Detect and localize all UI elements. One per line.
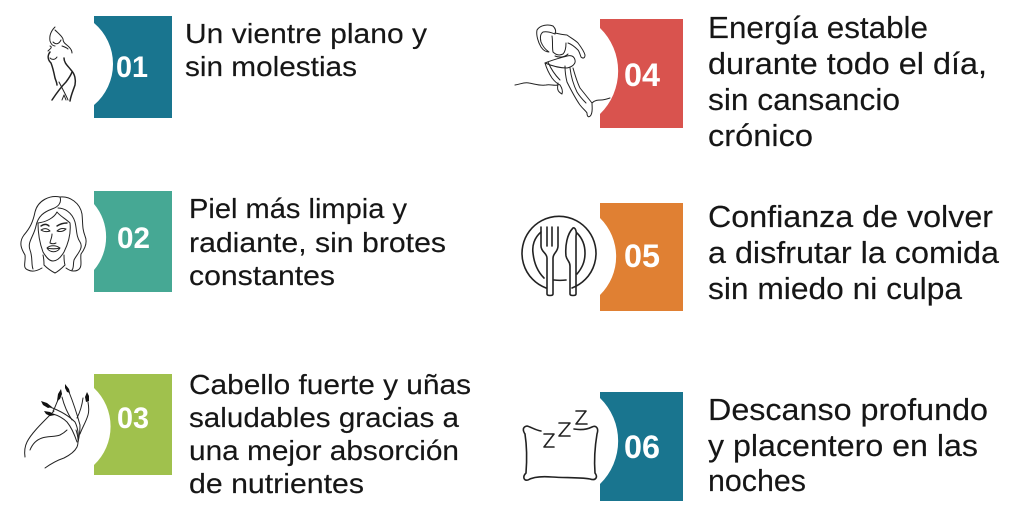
text block 06: y placentero en las bbox=[708, 429, 978, 463]
icon: plate with fork and knife bbox=[522, 216, 596, 296]
number tab 05 bbox=[600, 203, 683, 311]
text block 05: Confianza de volver bbox=[708, 200, 993, 234]
text block 01: Un vientre plano y bbox=[185, 18, 427, 49]
icon: hand with long nails bbox=[25, 392, 89, 468]
text block 04 bbox=[708, 11, 987, 153]
icon: pillow with zzz bbox=[523, 411, 598, 480]
text block 03: de nutrientes bbox=[189, 468, 364, 499]
text block 05: a disfrutar la comida bbox=[708, 236, 999, 270]
number 02: 02 bbox=[117, 222, 150, 255]
number tab 06 bbox=[600, 392, 683, 501]
number 06: 06 bbox=[624, 429, 660, 465]
panel: benefit 05 bbox=[522, 200, 999, 311]
icon: female silhouette bbox=[48, 27, 75, 101]
text block 06: Descanso profundo bbox=[708, 393, 988, 427]
number tab 01 bbox=[94, 16, 172, 118]
text block 03: saludables gracias a bbox=[189, 402, 459, 433]
text block 05: sin miedo ni culpa bbox=[708, 272, 962, 306]
text block 01: sin molestias bbox=[185, 51, 357, 82]
text block 04: crónico bbox=[708, 119, 813, 153]
text block 04: durante todo el día, bbox=[708, 47, 987, 81]
number 04: 04 bbox=[624, 57, 660, 93]
text block 03: Cabello fuerte y uñas bbox=[189, 369, 471, 400]
panel: benefit 04 bbox=[515, 11, 987, 153]
panel: benefit 02 bbox=[21, 191, 446, 292]
panel: benefit 06 bbox=[523, 392, 988, 501]
text block 05 bbox=[708, 200, 999, 306]
number 01: 01 bbox=[116, 51, 148, 84]
text block 04: Energía estable bbox=[708, 11, 928, 45]
number tab 02 bbox=[94, 191, 172, 292]
number 03: 03 bbox=[117, 402, 149, 435]
text block 04: sin cansancio bbox=[708, 83, 900, 117]
panel: benefit 01 bbox=[48, 16, 427, 118]
text block 02: constantes bbox=[189, 260, 335, 291]
text block 02: Piel más limpia y bbox=[189, 193, 407, 224]
text block 06: noches bbox=[708, 464, 806, 498]
number tab 03 bbox=[94, 374, 172, 475]
number 05: 05 bbox=[624, 238, 660, 274]
text block 06 bbox=[708, 393, 988, 498]
text block 01 bbox=[185, 18, 427, 82]
panel: benefit 03 bbox=[25, 369, 471, 499]
text block 02: radiante, sin brotes bbox=[189, 227, 446, 258]
icon: woman face with wavy hair bbox=[21, 197, 86, 273]
text block 03 bbox=[189, 369, 471, 499]
text block 03: una mejor absorción bbox=[189, 435, 459, 466]
number tab 04 bbox=[600, 19, 683, 128]
icon: nails bbox=[41, 384, 89, 416]
text block 02 bbox=[189, 193, 446, 291]
icon: running woman line drawing bbox=[515, 25, 610, 117]
